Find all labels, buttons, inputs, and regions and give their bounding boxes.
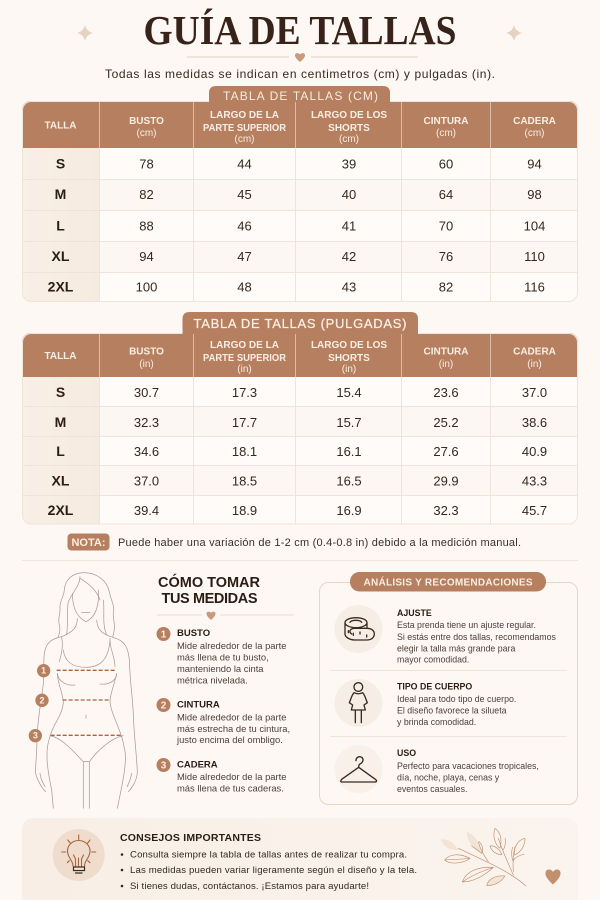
tips list [121, 850, 417, 892]
step: cintura: justo encima del ombligo. [176, 734, 283, 745]
table rows inches: 30.7 [134, 385, 159, 400]
section tab: inches: TABLA DE TALLAS (PULGADAS) [194, 316, 406, 331]
panel: important tips [22, 818, 578, 900]
measuring point 3 [29, 729, 42, 742]
table rows inches: 39.4 [134, 503, 159, 518]
table body background [22, 333, 578, 524]
step: cintura: CINTURA [177, 700, 220, 710]
table header cm: LARGO DE LA [210, 110, 279, 121]
table header inches: (in) [342, 364, 356, 375]
table rows cm: 48 [237, 280, 252, 294]
panel heading pill: ANÁLISIS Y RECOMENDACIONES [364, 576, 533, 588]
measuring point 1: 1 [41, 666, 46, 676]
table header cm: CADERA [513, 116, 556, 127]
item: ajuste [334, 605, 557, 664]
heading: CÓMO TOMAR [158, 573, 261, 591]
table header inches: BUSTO [129, 346, 164, 358]
table rows inches: 40.9 [522, 444, 547, 459]
table header inches: SHORTS [328, 353, 370, 364]
table rows cm: 46 [237, 218, 252, 233]
table rows inches: 38.6 [522, 415, 547, 430]
table rows cm: 43 [342, 280, 356, 294]
title divider with heart [187, 53, 418, 62]
tips list: Las medidas pueden variar ligeramente según el diseño y la tela. [130, 865, 417, 876]
note: Puede haber una variación de 1-2 cm (0.4-0.8 in) debido a la medición manual. [118, 537, 521, 549]
note: NOTA: [71, 537, 106, 549]
table rows inches: 17.3 [232, 385, 257, 400]
table header inches: LARGO DE LA [210, 340, 279, 351]
heading divider with heart [157, 612, 294, 620]
step: busto: manteniendo la cinta [177, 663, 264, 674]
step: cintura: 2 [161, 700, 167, 712]
step: cadera: Mide alrededor de la parte [177, 771, 286, 782]
table header cm: CINTURA [424, 116, 468, 127]
panel: table inches [22, 312, 578, 524]
table rows inches: 37.0 [134, 474, 159, 488]
table header cm: (cm) [339, 134, 359, 145]
item: uso: eventos casuales. [397, 784, 467, 794]
table rows cm: 94 [139, 249, 154, 264]
step: cadera: más llena de tus caderas. [177, 782, 284, 794]
measuring point 2 [35, 694, 49, 707]
table rows cm: 100 [136, 280, 157, 294]
table rows cm: 2XL [48, 278, 74, 294]
icon: tape measure [345, 618, 374, 640]
table rows cm: 94 [527, 156, 542, 172]
table rows inches: 32.3 [433, 503, 459, 518]
step: cadera: CADERA [177, 760, 218, 770]
table header cm: LARGO DE LOS [311, 110, 387, 121]
step: busto: Mide alrededor de la parte [177, 640, 286, 651]
item: uso: USO [397, 748, 416, 758]
table header inches: CADERA [513, 346, 556, 358]
table rows cm: 78 [139, 156, 154, 172]
table header inches: (in) [139, 359, 154, 370]
table header inches: (in) [439, 359, 453, 370]
measuring point 1 [37, 664, 50, 677]
step: busto [156, 627, 286, 686]
icon: light bulb [53, 829, 105, 881]
table rows cm: XL [52, 248, 70, 264]
measuring point 2: 2 [39, 695, 44, 705]
tips list: Consulta siempre la tabla de tallas antes de realizar tu compra. [130, 850, 407, 860]
item: tipo de cuerpo [334, 679, 516, 727]
table rows inches: 18.5 [232, 474, 257, 488]
item: tipo de cuerpo: El diseño favorece la silueta [397, 706, 507, 716]
step: cadera: 3 [161, 760, 167, 772]
table header cm: (cm) [136, 128, 156, 139]
icon: left sparkle [77, 25, 93, 41]
table rows inches: 32.3 [134, 415, 159, 430]
tips list: Si tienes dudas, contáctanos. ¡Estamos para ayudarte! [130, 881, 369, 892]
table header cm: SHORTS [328, 123, 370, 134]
table header inches [44, 340, 556, 375]
icon: body figure [349, 683, 367, 723]
table rows inches: 29.9 [433, 474, 459, 488]
table header inches: LARGO DE LOS [311, 340, 387, 351]
panel: important tips: CONSEJOS IMPORTANTES [120, 832, 261, 844]
table rows inches: 34.6 [134, 444, 159, 459]
item: tipo de cuerpo: TIPO DE CUERPO [397, 682, 472, 692]
table header cm: TALLA [44, 120, 77, 132]
table rows cm: 39 [342, 156, 356, 172]
step: cadera [156, 758, 286, 794]
table rows inches: 37.0 [522, 385, 547, 400]
panel: how to measure [156, 573, 294, 794]
table rows inches: 45.7 [522, 503, 547, 518]
table header cm [44, 110, 556, 145]
note [68, 534, 521, 550]
table header inches: (in) [527, 359, 542, 370]
step: cintura [156, 698, 290, 745]
table rows inches: 16.5 [336, 474, 362, 488]
table rows cm: 42 [342, 249, 356, 264]
icon: hanger [341, 757, 377, 782]
panel: analysis and recommendations [320, 572, 578, 804]
item: uso: día, noche, playa, cenas y [397, 772, 500, 782]
panel: table cm [22, 86, 578, 302]
table rows cm: 47 [237, 249, 252, 264]
item: ajuste: AJUSTE [397, 608, 432, 618]
title: GUÍA DE TALLAS [144, 7, 456, 53]
step: cintura: Mide alrededor de la parte [177, 712, 286, 722]
table header cm: (cm) [436, 128, 456, 139]
table rows inches [48, 384, 547, 518]
heading: TUS MEDIDAS [162, 591, 258, 607]
table rows inches: 25.2 [433, 415, 459, 430]
table rows inches: 16.9 [336, 503, 362, 518]
table rows cm [48, 156, 545, 294]
section tab: cm: TABLA DE TALLAS (CM) [223, 89, 378, 103]
table header inches: (in) [237, 364, 252, 375]
table rows cm: 44 [237, 156, 252, 172]
table header cm: (cm) [234, 134, 254, 145]
item: ajuste: elegir la talla más grande para [397, 644, 515, 654]
subtitle: Todas las medidas se indican en centimetros (cm) y pulgadas (in). [105, 67, 495, 81]
table rows inches: 18.9 [232, 503, 257, 518]
item: tipo de cuerpo: Ideal para todo tipo de cuerpo. [397, 694, 516, 704]
table rows inches: 2XL [48, 502, 74, 518]
step: busto: métrica nivelada. [177, 674, 248, 686]
icon: right sparkle [506, 25, 522, 41]
table rows inches: 16.1 [336, 444, 362, 459]
step: busto: BUSTO [177, 628, 210, 639]
heading [158, 573, 261, 607]
table rows cm: S [56, 156, 65, 172]
table header inches: PARTE SUPERIOR [203, 353, 287, 364]
item: uso: Perfecto para vacaciones tropicales, [397, 761, 539, 771]
table rows cm: 104 [524, 218, 545, 233]
table rows cm: 60 [439, 156, 453, 172]
table header inches: TALLA [44, 351, 77, 362]
item: ajuste: Si estás entre dos tallas, recomendamos [397, 632, 557, 642]
table header cm: PARTE SUPERIOR [203, 123, 287, 134]
table rows inches: 15.7 [336, 415, 362, 430]
table body background [22, 101, 578, 302]
table header inches: CINTURA [424, 346, 468, 358]
step: busto: más llena de tu busto, [177, 652, 269, 662]
table rows cm: 98 [527, 187, 542, 202]
item: tipo de cuerpo: y brinda comodidad. [397, 717, 476, 727]
table header cm: BUSTO [129, 116, 164, 127]
item: uso [334, 745, 539, 794]
step: cintura: más estrecha de tu cintura, [177, 723, 290, 734]
measuring point 3: 3 [33, 731, 38, 741]
illustration: body with measuring lines [29, 573, 137, 808]
table rows inches: M [55, 414, 66, 430]
table rows cm: 45 [237, 187, 252, 202]
table header cm: (cm) [524, 128, 544, 139]
table rows cm: M [55, 186, 66, 202]
table rows cm: 76 [439, 249, 453, 264]
table rows inches: L [56, 443, 65, 459]
section tab: inches [182, 312, 418, 334]
icon: heart [546, 869, 560, 884]
table rows cm: 64 [439, 187, 453, 202]
table rows inches: XL [52, 472, 70, 488]
table rows inches: S [56, 384, 65, 400]
item: ajuste: mayor comodidad. [397, 654, 469, 664]
table rows inches: 17.7 [232, 415, 257, 430]
table rows cm: 116 [524, 280, 545, 294]
panel heading pill [350, 572, 546, 592]
table rows inches: 23.6 [433, 385, 459, 400]
table rows inches: 27.6 [433, 444, 459, 459]
table rows cm: 41 [342, 218, 356, 233]
table rows inches: 43.3 [522, 474, 547, 488]
table rows cm: 82 [439, 280, 453, 294]
table rows inches: 15.4 [336, 385, 362, 400]
table rows cm: 70 [439, 218, 453, 233]
table rows cm: 40 [342, 187, 356, 202]
table rows cm: 82 [139, 187, 154, 202]
item: ajuste: Esta prenda tiene un ajuste regular. [397, 620, 536, 630]
table rows cm: 110 [524, 249, 545, 264]
decoration: leaf branch [441, 828, 526, 886]
step: busto: 1 [161, 630, 167, 640]
table rows inches: 18.1 [232, 444, 257, 459]
table rows cm: L [56, 217, 65, 233]
table rows cm: 88 [139, 218, 154, 233]
